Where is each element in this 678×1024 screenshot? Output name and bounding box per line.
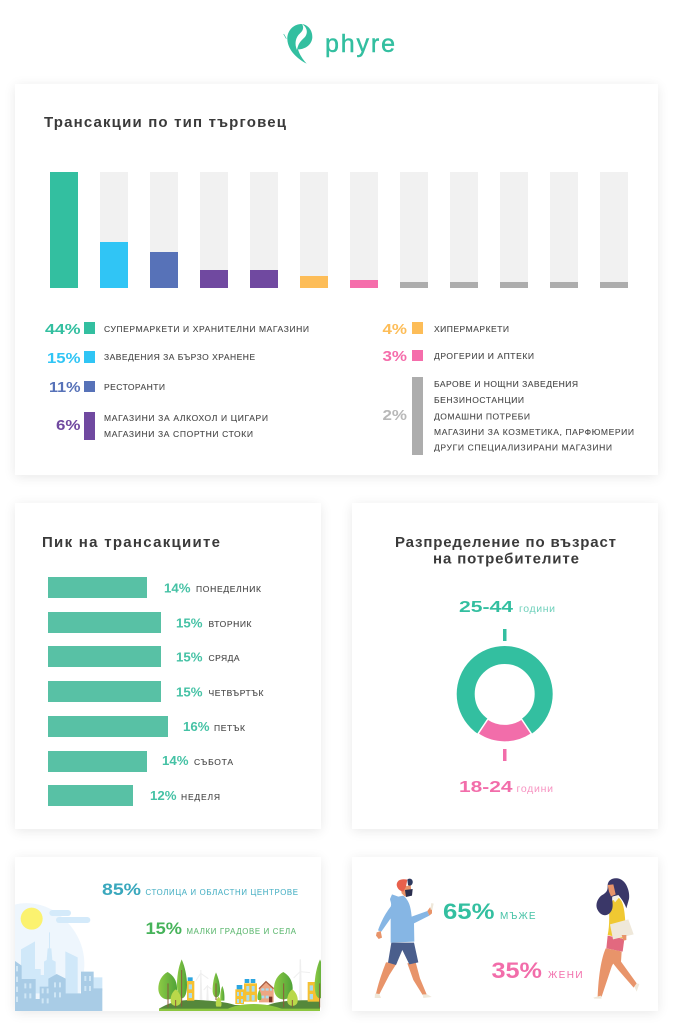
stat: 15% small towns and villages bbox=[146, 919, 297, 938]
row: Saturday bbox=[48, 751, 233, 772]
heading: на потребителите bbox=[433, 550, 579, 568]
logo: phyre bbox=[284, 24, 395, 64]
legend: supermarkets 44%: 44% bbox=[45, 321, 80, 338]
panel: settlement type bbox=[15, 857, 325, 1013]
legend: other categories 2% bbox=[382, 377, 634, 455]
wordmark: phyre bbox=[325, 30, 395, 58]
row: Tuesday bbox=[48, 612, 252, 633]
stat: 85% capital and regional centres: 85% bbox=[102, 880, 141, 899]
legend: hypermarkets 4% bbox=[382, 321, 509, 338]
stat: 65% men: МЪЖЕ bbox=[500, 911, 536, 922]
legend: drugstores 3%: ДРОГЕРИИ И АПТЕКИ bbox=[434, 351, 534, 361]
row: Wednesday: СРЯДА bbox=[208, 653, 240, 663]
stat: 35% women bbox=[492, 958, 582, 983]
bar chart bbox=[50, 172, 628, 288]
legend: other categories 2%: БЕНЗИНОСТАНЦИИ bbox=[434, 395, 524, 405]
legend: hypermarkets 4%: ХИПЕРМАРКЕТИ bbox=[434, 324, 509, 334]
illustration: man bbox=[375, 879, 434, 998]
stat: 15% small towns and villages: МАЛКИ ГРАДОВЕ И СЕЛА bbox=[186, 927, 297, 936]
heading bbox=[395, 534, 616, 568]
label: 25-44 years: години bbox=[519, 603, 555, 615]
legend: alcohol and sports 6%: МАГАЗИНИ ЗА АЛКОХОЛ И ЦИГАРИ bbox=[104, 413, 268, 423]
row: Saturday: СЪБОТА bbox=[194, 757, 233, 767]
row: Thursday bbox=[48, 681, 264, 702]
label: 18-24 years: години bbox=[516, 783, 553, 795]
row: Friday bbox=[48, 716, 245, 737]
legend: alcohol and sports 6%: МАГАЗИНИ ЗА СПОРТНИ СТОКИ bbox=[104, 429, 253, 439]
legend: fast food 15% bbox=[47, 350, 255, 367]
row: Tuesday: ВТОРНИК bbox=[208, 619, 252, 629]
label: 18-24 years bbox=[459, 779, 553, 796]
stat: 85% capital and regional centres bbox=[102, 880, 298, 899]
row: Tuesday: 15% bbox=[176, 616, 202, 630]
stat: 65% men bbox=[443, 899, 536, 924]
tick: 18-24 bbox=[503, 749, 506, 761]
legend: restaurants 11%: РЕСТОРАНТИ bbox=[104, 382, 165, 392]
legend: hypermarkets 4%: 4% bbox=[382, 321, 407, 338]
row: Monday: 14% bbox=[164, 582, 190, 596]
legend: restaurants 11% bbox=[49, 379, 165, 396]
row: Wednesday: 15% bbox=[176, 650, 202, 664]
label: 25-44 years: 25-44 bbox=[459, 599, 513, 616]
illustration: woman bbox=[593, 878, 639, 999]
row: Monday: ПОНЕДЕЛНИК bbox=[196, 584, 261, 594]
row: Thursday: ЧЕТВЪРТЪК bbox=[208, 688, 264, 698]
heading: Пик на трансакциите bbox=[42, 534, 220, 551]
row: Sunday bbox=[48, 785, 220, 806]
stat: 65% men: 65% bbox=[443, 899, 494, 924]
label: 25-44 years bbox=[459, 599, 555, 616]
tick: 25-44 bbox=[503, 629, 506, 641]
legend: drugstores 3%: 3% bbox=[382, 348, 407, 365]
stat: 15% small towns and villages: 15% bbox=[146, 919, 182, 938]
legend: alcohol and sports 6% bbox=[56, 412, 268, 440]
legend: other categories 2%: ДОМАШНИ ПОТРЕБИ bbox=[434, 412, 530, 422]
label: 18-24 years: 18-24 bbox=[459, 779, 513, 796]
panel: consumer age distribution bbox=[352, 503, 658, 831]
legend: alcohol and sports 6%: 6% bbox=[56, 417, 80, 434]
legend: other categories 2%: БАРОВЕ И НОЩНИ ЗАВЕДЕНИЯ bbox=[434, 379, 578, 389]
legend: other categories 2%: 2% bbox=[382, 407, 407, 424]
row: Saturday: 14% bbox=[162, 754, 188, 768]
legend: fast food 15%: 15% bbox=[47, 350, 80, 367]
row: Friday: 16% bbox=[183, 720, 210, 734]
row: Thursday: 15% bbox=[176, 686, 202, 700]
panel: gender split bbox=[352, 857, 658, 1013]
heading: Трансакции по тип търговец bbox=[44, 114, 287, 131]
row: Wednesday bbox=[48, 646, 240, 667]
stat: 35% women: 35% bbox=[492, 958, 542, 983]
heading: Разпределение по възраст bbox=[395, 534, 616, 551]
donut chart bbox=[466, 655, 544, 742]
legend: restaurants 11%: 11% bbox=[49, 379, 80, 396]
legend: fast food 15%: ЗАВЕДЕНИЯ ЗА БЪРЗО ХРАНЕНЕ bbox=[104, 352, 255, 362]
legend: drugstores 3% bbox=[382, 348, 534, 365]
legend: other categories 2%: МАГАЗИНИ ЗА КОЗМЕТИКА, ПАРФЮМЕРИИ bbox=[434, 427, 634, 437]
row: Monday bbox=[48, 577, 261, 598]
legend: other categories 2%: ДРУГИ СПЕЦИАЛИЗИРАНИ МАГАЗИНИ bbox=[434, 442, 612, 452]
row: Friday: ПЕТЪК bbox=[214, 723, 245, 733]
row: Sunday: НЕДЕЛЯ bbox=[181, 792, 220, 802]
stat: 35% women: ЖЕНИ bbox=[548, 970, 582, 981]
legend: supermarkets 44% bbox=[45, 321, 309, 338]
icon: phyre leaf mark bbox=[284, 24, 312, 64]
panel: transaction peak by weekday bbox=[15, 503, 321, 831]
illustration: village bbox=[158, 959, 325, 1011]
stat: 85% capital and regional centres: СТОЛИЦА И ОБЛАСТНИ ЦЕНТРОВЕ bbox=[146, 888, 298, 897]
illustration: city bbox=[15, 903, 102, 1011]
panel: transactions by merchant type bbox=[15, 84, 658, 477]
row: Sunday: 12% bbox=[150, 789, 176, 803]
legend: supermarkets 44%: СУПЕРМАРКЕТИ И ХРАНИТЕЛНИ МАГАЗИНИ bbox=[104, 324, 309, 334]
